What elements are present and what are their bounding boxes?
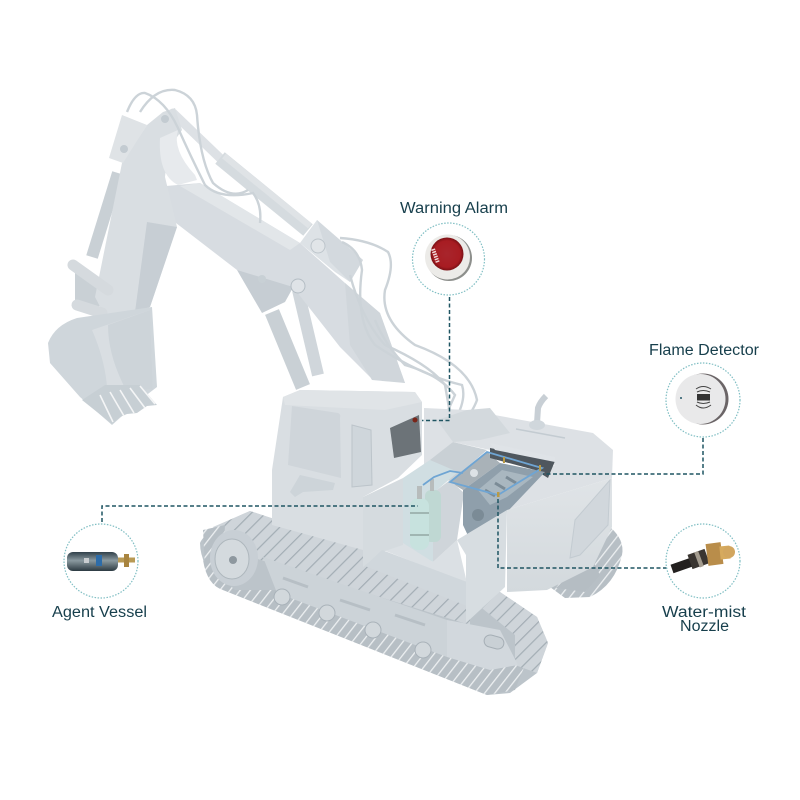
compartment interior [383,442,555,583]
icon: detector [676,374,728,424]
boom arm [148,183,405,387]
callout: warning alarm [400,200,508,295]
front track [200,511,548,695]
callout: agent vessel [52,524,147,621]
callout: agent vessel: Agent Vessel [52,604,147,621]
icon: vessel [67,552,135,571]
right door and rear housing [457,478,612,623]
undercarriage frame [263,557,518,670]
far track [550,527,622,598]
stick arm [73,108,197,322]
callout: warning alarm: Warning Alarm [400,200,508,217]
gas tanks [410,479,441,550]
callout: water-mist nozzle: Water-mist [662,604,747,621]
icon: nozzle [672,546,735,569]
hydraulic hoses [127,90,477,455]
callout: water-mist nozzle [662,524,747,635]
dashed leader lines [102,297,703,568]
deck front edge [365,550,467,606]
exhaust pipe [529,396,546,430]
bucket [48,307,157,425]
nozzle markers [497,457,541,497]
cab [272,390,422,550]
icon: red alarm [425,234,472,281]
blue pipe network [423,452,542,495]
callout: water-mist nozzle: Nozzle [680,618,729,635]
callout: flame detector: Flame Detector [649,342,759,359]
left door [363,478,403,567]
callout: flame detector [649,342,759,437]
engine [463,463,545,540]
excavator illustration [48,90,622,695]
upper hydraulic cylinder [173,113,363,282]
track wheel [210,530,258,586]
rear deck [424,408,613,510]
